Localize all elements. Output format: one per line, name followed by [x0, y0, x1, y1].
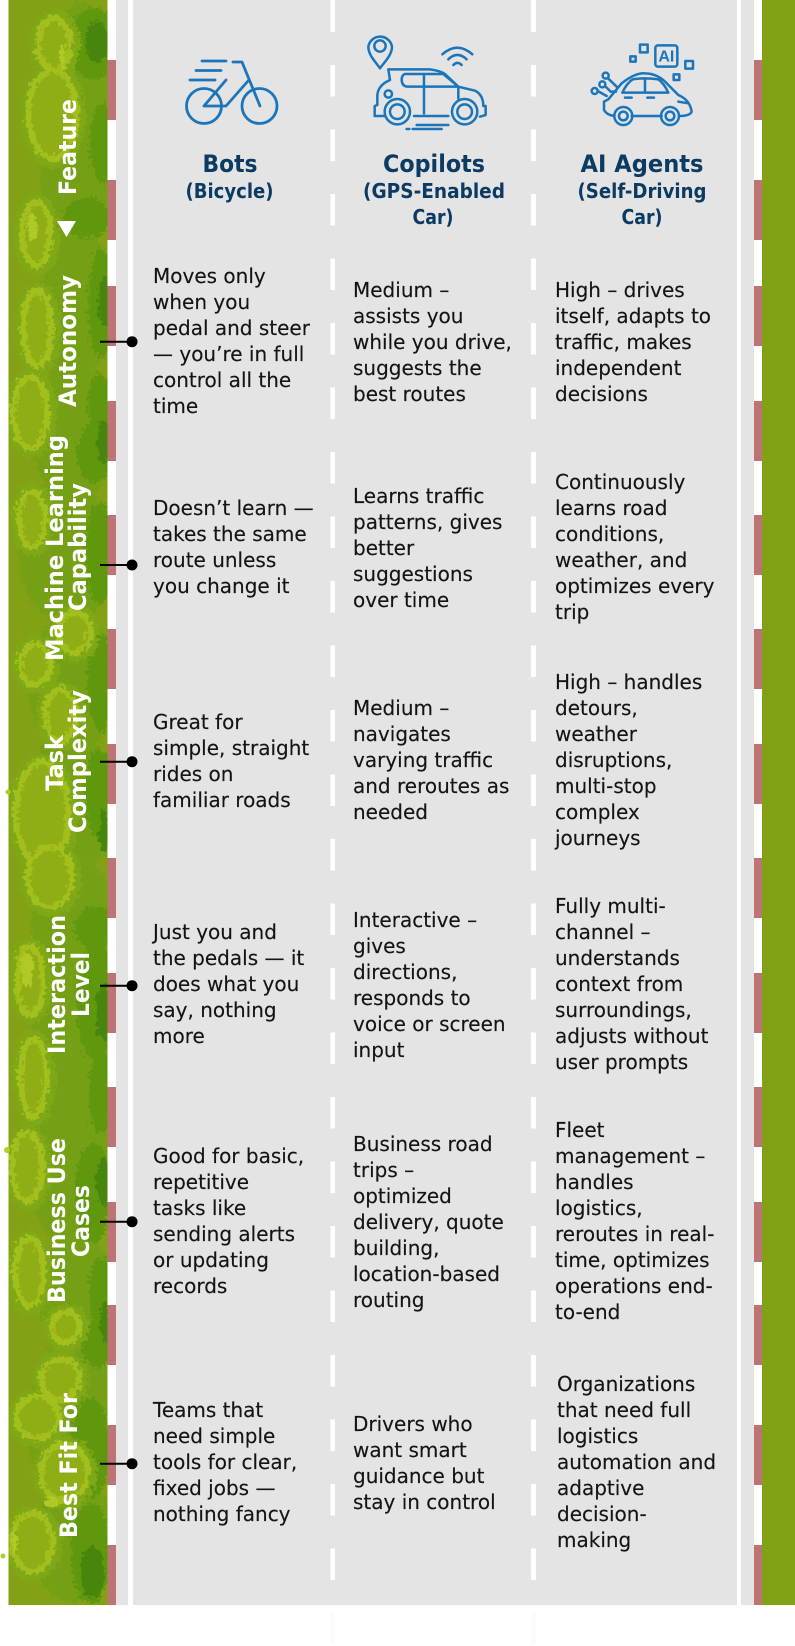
text: agents autonomy: independent	[555, 356, 682, 380]
text: copilots complexity: Medium –	[353, 696, 449, 720]
text: bots complexity: rides on	[153, 762, 233, 786]
heading: Autonomy: Autonomy	[54, 275, 82, 407]
text: bots use cases: records	[153, 1274, 227, 1298]
text: copilots best fit: Drivers who	[353, 1412, 473, 1436]
heading: Task Complexity	[41, 690, 92, 833]
text: agents autonomy: High – drives	[555, 278, 685, 302]
right grass verge	[762, 0, 795, 1605]
text: copilots autonomy: assists you	[353, 304, 463, 328]
text: copilots learning: better	[353, 536, 415, 560]
heading: Copilots: Copilots	[383, 150, 485, 178]
text: agents interaction: surroundings,	[555, 998, 692, 1022]
text: agents interaction: channel –	[555, 920, 650, 944]
text: agents learning: weather, and	[555, 548, 687, 572]
row: Business Use Cases	[153, 1118, 714, 1324]
heading: Copilots	[363, 150, 505, 229]
text: copilots learning: over time	[353, 588, 449, 612]
text: copilots interaction: voice or screen	[353, 1012, 506, 1036]
text: agents use cases: handles	[555, 1170, 634, 1194]
text: copilots interaction: responds to	[353, 986, 471, 1010]
text: bots use cases: tasks like	[153, 1196, 246, 1220]
text: agents interaction: adjusts without	[555, 1024, 709, 1048]
text: copilots use cases: routing	[353, 1288, 424, 1312]
text: agents best fit: Organizations	[557, 1372, 695, 1396]
text: copilots complexity: varying traffic	[353, 748, 493, 772]
heading: Machine Learning Capability: Capability	[64, 483, 92, 611]
heading: Machine Learning Capability	[41, 435, 92, 661]
text: copilots best fit: want smart	[353, 1438, 467, 1462]
text: bots interaction: more	[153, 1024, 205, 1048]
text: bots use cases: Good for basic,	[153, 1144, 304, 1168]
heading: Machine Learning Capability: Machine Learning	[41, 435, 69, 661]
heading: AI Agents: AI Agents	[580, 150, 704, 178]
heading: AI Agents: (Self-Driving	[578, 179, 706, 203]
text: copilots autonomy: best routes	[353, 382, 466, 406]
icon: connected car	[368, 37, 486, 129]
icon: AI self-driving car: AI	[658, 49, 674, 66]
text: bots complexity: Great for	[153, 710, 243, 734]
text: agents best fit: making	[557, 1528, 631, 1552]
text: copilots autonomy: while you drive,	[353, 330, 512, 354]
heading: Copilots: (GPS-Enabled	[363, 179, 505, 203]
text: agents learning: learns road	[555, 496, 667, 520]
text: bots use cases: or updating	[153, 1248, 269, 1272]
heading: Bots: (Bicycle)	[186, 179, 274, 203]
heading: Interaction Level: Interaction	[43, 915, 71, 1054]
heading: Business Use Cases	[43, 1138, 95, 1303]
text: copilots complexity: navigates	[353, 722, 451, 746]
text: bots learning: route unless	[153, 548, 276, 572]
text: agents complexity: journeys	[554, 826, 641, 850]
heading: Business Use Cases: Business Use	[43, 1138, 71, 1303]
heading: Feature: Feature	[54, 99, 82, 195]
text: bots autonomy: control all the	[153, 368, 291, 392]
text: agents learning: Continuously	[555, 470, 686, 494]
text: agents best fit: that need full	[557, 1398, 691, 1422]
text: bots best fit: Teams that	[152, 1398, 263, 1422]
text: bots best fit: need simple	[153, 1424, 275, 1448]
row: Interaction Level	[151, 894, 709, 1074]
text: copilots autonomy: suggests the	[353, 356, 482, 380]
text: bots best fit: nothing fancy	[153, 1502, 291, 1526]
row: Best Fit For	[152, 1372, 716, 1552]
text: copilots best fit: stay in control	[353, 1490, 496, 1514]
text: copilots complexity: and reroutes as	[353, 774, 509, 798]
icon: AI self-driving car	[592, 45, 693, 125]
text: agents autonomy: itself, adapts to	[555, 304, 711, 328]
text: agents use cases: to-end	[555, 1300, 620, 1324]
text: agents complexity: weather	[555, 722, 638, 746]
text: bots learning: you change it	[153, 574, 290, 598]
text: bots best fit: fixed jobs —	[153, 1476, 275, 1500]
heading: Bots	[186, 150, 274, 203]
text: bots best fit: tools for clear,	[153, 1450, 297, 1474]
text: agents best fit: automation and	[557, 1450, 716, 1474]
text: bots use cases: sending alerts	[153, 1222, 295, 1246]
text: agents learning: conditions,	[555, 522, 664, 546]
text: agents use cases: management –	[555, 1144, 705, 1168]
text: copilots interaction: input	[353, 1038, 405, 1062]
text: agents complexity: complex	[555, 800, 640, 824]
icon: bicycle	[186, 61, 277, 124]
text: agents learning: trip	[555, 600, 589, 624]
text: agents interaction: user prompts	[555, 1050, 688, 1074]
text: agents autonomy: traffic, makes	[555, 330, 692, 354]
row heading column	[41, 99, 95, 1538]
text: agents complexity: High – handles	[555, 670, 702, 694]
text: agents learning: optimizes every	[555, 574, 715, 598]
heading: AI Agents: Car)	[622, 205, 662, 229]
text: agents best fit: adaptive	[557, 1476, 644, 1500]
row connector markers	[100, 336, 138, 1469]
text: copilots use cases: building,	[353, 1236, 439, 1260]
text: agents best fit: decision-	[557, 1502, 647, 1526]
text: copilots use cases: trips –	[353, 1158, 414, 1182]
heading: Interaction Level: Level	[67, 952, 95, 1017]
text: bots interaction: the pedals — it	[153, 946, 304, 970]
text: agents best fit: logistics	[557, 1424, 638, 1448]
text: bots autonomy: time	[153, 394, 198, 418]
text: bots interaction: say, nothing	[153, 998, 277, 1022]
text: copilots autonomy: Medium –	[353, 278, 449, 302]
text: agents interaction: Fully multi-	[555, 894, 666, 918]
text: bots autonomy: Moves only	[153, 264, 266, 288]
text: bots autonomy: pedal and steer	[153, 316, 311, 340]
text: copilots use cases: delivery, quote	[353, 1210, 504, 1234]
heading: Interaction Level	[43, 915, 95, 1054]
heading: Bots: Bots	[202, 150, 258, 178]
text: agents use cases: time, optimizes	[555, 1248, 710, 1272]
text: bots learning: Doesn’t learn —	[153, 496, 314, 520]
text: bots learning: takes the same	[153, 522, 307, 546]
heading: AI Agents	[578, 150, 706, 229]
heading: Business Use Cases: Cases	[67, 1185, 95, 1257]
text: copilots use cases: optimized	[353, 1184, 452, 1208]
heading: Best Fit For: Best Fit For	[55, 1393, 83, 1538]
text: agents interaction: understands	[555, 946, 680, 970]
heading: Copilots: Car)	[412, 205, 454, 229]
text: copilots complexity: needed	[353, 800, 428, 824]
text: copilots use cases: location-based	[353, 1262, 500, 1286]
text: agents use cases: logistics,	[555, 1196, 643, 1220]
text: bots autonomy: when you	[153, 290, 250, 314]
text: agents interaction: context from	[555, 972, 683, 996]
text: agents use cases: operations end-	[555, 1274, 713, 1298]
text: copilots learning: suggestions	[353, 562, 473, 586]
text: agents complexity: disruptions,	[555, 748, 672, 772]
heading: Task Complexity: Task	[41, 734, 69, 791]
text: copilots learning: Learns traffic	[353, 484, 484, 508]
row: Machine Learning Capability	[153, 470, 715, 624]
text: copilots best fit: guidance but	[353, 1464, 485, 1488]
text: copilots interaction: directions,	[353, 960, 457, 984]
text: copilots learning: patterns, gives	[353, 510, 502, 534]
text: agents use cases: Fleet	[555, 1118, 605, 1142]
row: Autonomy	[153, 264, 711, 418]
left tree strip	[0, 0, 116, 1605]
text: agents complexity: detours,	[555, 696, 638, 720]
text: bots use cases: repetitive	[153, 1170, 249, 1194]
text: bots complexity: simple, straight	[153, 736, 309, 760]
text: bots interaction: Just you and	[151, 920, 277, 944]
text: agents use cases: reroutes in real-	[555, 1222, 714, 1246]
text: bots interaction: does what you	[153, 972, 299, 996]
text: bots complexity: familiar roads	[153, 788, 291, 812]
text: agents autonomy: decisions	[555, 382, 648, 406]
row: Task Complexity	[153, 670, 702, 850]
text: copilots interaction: gives	[353, 934, 406, 958]
text: copilots interaction: Interactive –	[353, 908, 477, 932]
text: bots autonomy: — you’re in full	[153, 342, 304, 366]
heading: Task Complexity: Complexity	[64, 690, 92, 833]
icon: down arrow	[57, 221, 76, 237]
text: agents complexity: multi-stop	[555, 774, 657, 798]
text: copilots use cases: Business road	[353, 1132, 493, 1156]
